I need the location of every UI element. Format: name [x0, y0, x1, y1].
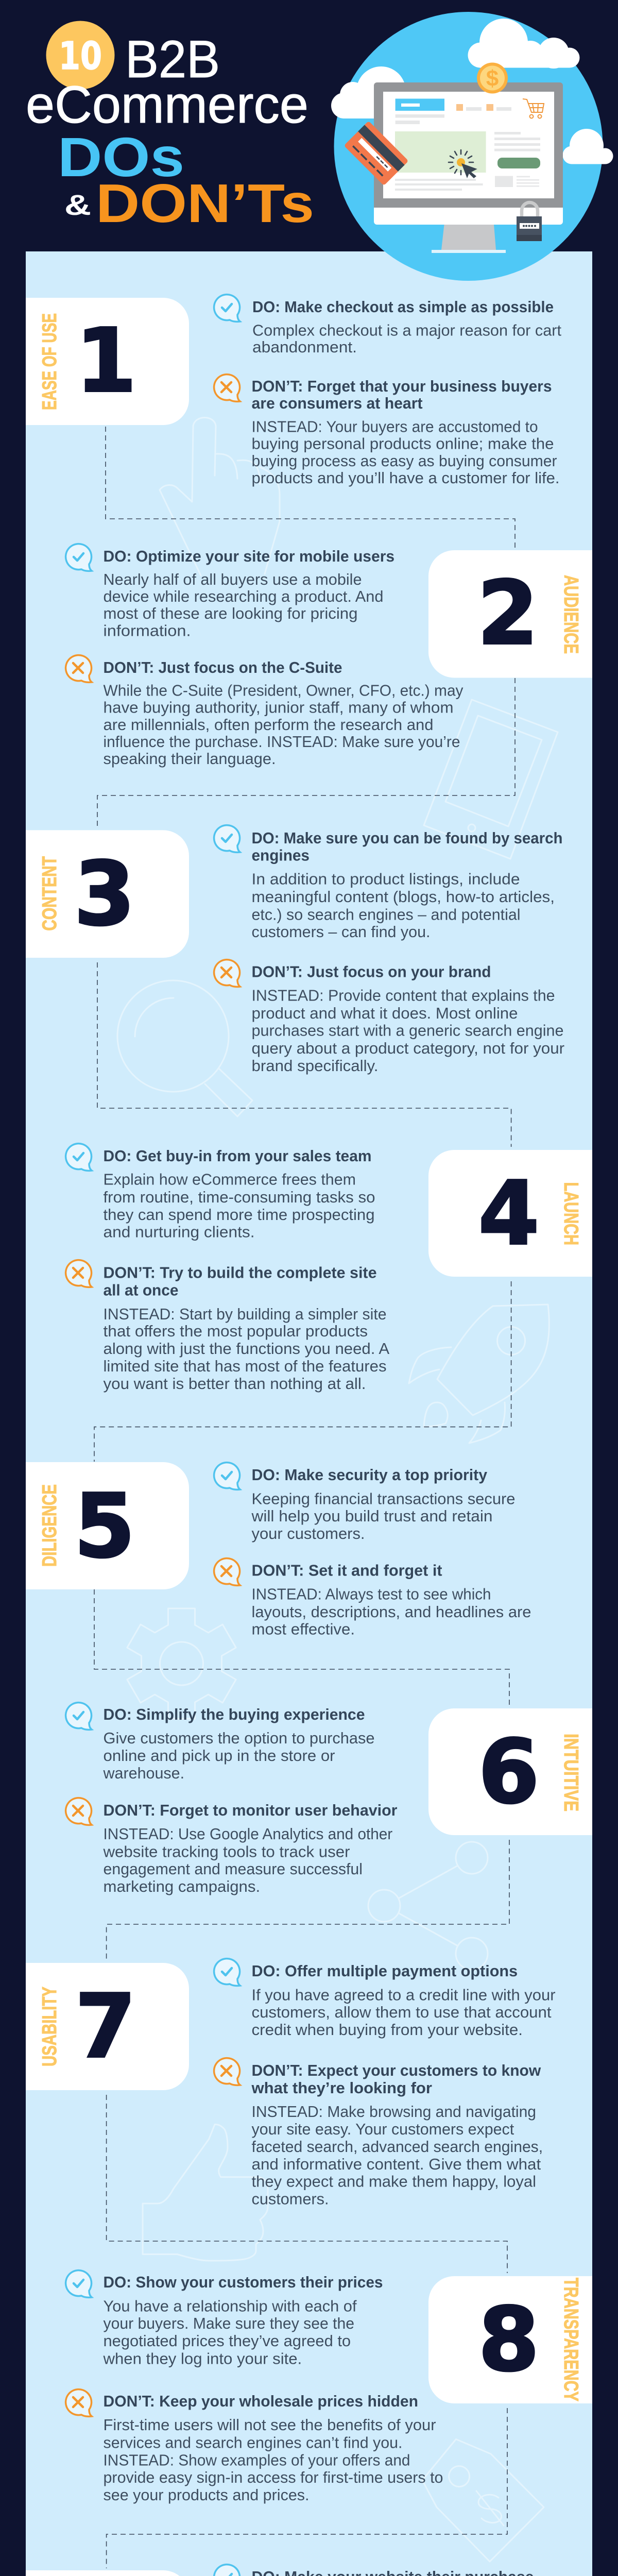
do text: DO: Simplify the buying experience: [103, 1705, 365, 1723]
don't text: [251, 962, 564, 1075]
don't text: engagement and measure successful: [103, 1860, 363, 1878]
don't text: what they’re looking for: [251, 2079, 432, 2097]
icon: credit card: [344, 121, 408, 185]
background icon: thumbs up: [143, 2124, 268, 2261]
do text: engines: [251, 846, 310, 865]
do text: most of these are looking for pricing: [103, 604, 357, 622]
do text: meaningful content (blogs, how-to articles,: [251, 888, 555, 906]
do text: from routine, time-consuming tasks so: [103, 1188, 375, 1206]
do text: information.: [103, 621, 191, 640]
icon: clouds: [331, 19, 613, 164]
step 6: intuitive: [66, 1703, 592, 1895]
background icon: rocket: [409, 1304, 549, 1443]
step 2: audience: [66, 544, 592, 768]
don't text: INSTEAD: Start by building a simpler site: [103, 1305, 386, 1323]
icon: do checkmark bubble: [214, 825, 240, 852]
number tab 2: [428, 550, 592, 678]
do text: Keeping financial transactions secure: [251, 1490, 515, 1507]
don't text: DON’T: Just focus on the C-Suite: [103, 658, 342, 676]
don't text: INSTEAD: Your buyers are accustomed to: [251, 417, 538, 436]
header illustration: computer with clouds: [331, 12, 613, 281]
do text: abandonment.: [252, 338, 357, 356]
don't text: While the C-Suite (President, Owner, CFO, etc.) may: [103, 682, 464, 700]
icon: don't cross bubble: [214, 960, 240, 987]
don't text: DON’T: Keep your wholesale prices hidden: [103, 2392, 418, 2410]
step 7: usability: [26, 1959, 555, 2208]
number tab 4: [428, 1150, 592, 1277]
badge number: 10: [59, 34, 102, 78]
icon: do checkmark bubble: [66, 1144, 92, 1171]
step 1: ease of use: [26, 295, 561, 487]
icon: don't cross bubble: [214, 375, 240, 401]
don't text: query about a product category, not for your: [251, 1039, 564, 1057]
do text: DO: Get buy-in from your sales team: [103, 1147, 372, 1165]
icon: do checkmark bubble: [214, 2565, 240, 2576]
dashed connector path: [94, 427, 515, 2576]
don't text: [251, 2061, 543, 2208]
don't text: are millennials, often perform the research and: [103, 716, 434, 734]
don't text: DON’T: Expect your customers to know: [251, 2061, 541, 2079]
icon: padlock: [517, 202, 542, 241]
number tab 7: [26, 1963, 189, 2090]
step 9: loyalty: [26, 2565, 552, 2576]
background icon: smartphone: [424, 700, 558, 859]
do text: DO: Make checkout as simple as possible: [252, 298, 554, 316]
do text: customers, allow them to use that account: [251, 2003, 552, 2021]
number tab 8: TRANSPARENCY: [560, 2278, 582, 2401]
step 4: launch: [66, 1144, 592, 1393]
don't text: speaking their language.: [103, 750, 276, 768]
do text: [103, 1705, 375, 1782]
don't text: DON’T: Set it and forget it: [251, 1561, 442, 1580]
don't text: [103, 1264, 389, 1393]
do text: Explain how eCommerce frees them: [103, 1171, 356, 1189]
don't text: INSTEAD: Show examples of your offers and: [103, 2451, 410, 2469]
number tab 2: 2: [477, 563, 538, 665]
don't text: layouts, descriptions, and headlines are: [251, 1603, 531, 1621]
do text: when they log into your site.: [102, 2349, 302, 2368]
number tab 8: [428, 2276, 592, 2403]
don't text: INSTEAD: Always test to see which: [251, 1585, 491, 1603]
do text: [251, 829, 562, 941]
don't text: services and search engines can’t find you.: [103, 2434, 403, 2452]
icon: don't cross bubble: [66, 1798, 92, 1825]
icon: don't cross bubble: [214, 1558, 240, 1585]
number tab 6: INTUITIVE: [560, 1734, 582, 1811]
do text: [103, 547, 394, 640]
background icon: price tag: [422, 2439, 544, 2562]
don't text: INSTEAD: Make browsing and navigating: [251, 2103, 536, 2121]
do text: will help you build trust and retain: [251, 1507, 492, 1525]
don't text: see your products and prices.: [103, 2486, 309, 2504]
don't text: First-time users will not see the benefits of your: [103, 2416, 436, 2434]
icon: do checkmark bubble: [66, 544, 92, 571]
number tab 1: 1: [76, 310, 136, 412]
number tab 6: [428, 1708, 592, 1835]
do text: they can spend more time prospecting: [103, 1206, 375, 1224]
icon: don't cross bubble: [66, 1260, 92, 1287]
icon: dollar coin: $: [486, 66, 499, 91]
step 5: diligence: [26, 1462, 531, 1638]
don't text: your site easy. Your customers expect: [251, 2120, 514, 2138]
do text: DO: Offer multiple payment options: [251, 1962, 518, 1980]
title line: B2B: B2B: [125, 30, 220, 89]
number tab 3: 3: [74, 843, 135, 945]
icon: don't cross bubble: [214, 2058, 240, 2085]
don't text: [251, 377, 559, 487]
background icon: gear: [127, 1608, 236, 1719]
number tab 9: [26, 2570, 189, 2576]
don't text: purchases start with a generic search engine: [251, 1022, 563, 1040]
number tab 4: 4: [478, 1163, 539, 1265]
don't text: [103, 2392, 443, 2504]
do text: DO: Optimize your site for mobile users: [103, 547, 394, 565]
don't text: limited site that has most of the features: [103, 1357, 386, 1375]
don't text: most effective.: [251, 1620, 355, 1638]
do text: In addition to product listings, include: [251, 870, 520, 888]
title line: eCommerce: eCommerce: [26, 75, 308, 134]
do text: DO: Show your customers their prices: [103, 2273, 383, 2291]
number tab 7: USABILITY: [39, 1987, 61, 2066]
do text: etc.) so search engines – and potential: [251, 906, 520, 923]
icon: don't cross bubble: [66, 655, 92, 682]
do text: [103, 1147, 375, 1241]
don't text: they expect and make them happy, loyal: [251, 2173, 536, 2191]
icon: do checkmark bubble: [214, 295, 240, 321]
don't text: are consumers at heart: [251, 394, 422, 412]
do text: [102, 2273, 383, 2368]
do text: Give customers the option to purchase: [103, 1729, 375, 1747]
do text: your buyers. Make sure they see the: [103, 2314, 354, 2332]
number tab 5: 5: [74, 1476, 135, 1578]
don't text: you want is better than nothing at all.: [103, 1375, 366, 1393]
do text: and nurturing clients.: [103, 1223, 254, 1241]
don't text: faceted search, advanced search engines,: [251, 2138, 543, 2156]
background icon: share network: [368, 1842, 488, 1970]
number tab 5: DILIGENCE: [39, 1484, 61, 1567]
icon: shopping cart: [523, 99, 544, 118]
don't text: customers.: [251, 2190, 329, 2208]
don't text: marketing campaigns.: [103, 1877, 260, 1895]
don't text: brand specifically.: [251, 1057, 378, 1075]
icon: do checkmark bubble: [66, 1703, 92, 1730]
do text: Complex checkout is a major reason for cart: [252, 321, 561, 340]
do text: If you have agreed to a credit line with your: [251, 1986, 555, 2004]
title ampersand: &: [64, 189, 91, 221]
don't text: all at once: [103, 1281, 178, 1299]
title line: DOs: DOs: [58, 126, 184, 188]
don't text: buying personal products online; make the: [251, 435, 554, 453]
icon: do checkmark bubble: [214, 1959, 240, 1986]
don't text: INSTEAD: Provide content that explains the: [251, 986, 555, 1004]
icon: yellow number badge: [46, 21, 114, 90]
background icon: pointing hand: [160, 417, 280, 575]
number tab 3: [26, 830, 189, 958]
do text: credit when buying from your website.: [251, 2021, 523, 2039]
don't text: [251, 1561, 531, 1638]
number tab 8: 8: [478, 2289, 539, 2391]
don't text: have buying authority, junior staff, many of whom: [103, 699, 453, 717]
do text: You have a relationship with each of: [103, 2297, 357, 2315]
don't text: provide easy sign-in access for first-time users to: [103, 2468, 443, 2486]
do text: warehouse.: [103, 1764, 184, 1782]
don't text: that offers the most popular products: [103, 1322, 368, 1340]
don't text: website tracking tools to track user: [102, 1842, 350, 1860]
number tab 7: 7: [75, 1976, 136, 2078]
icon: do checkmark bubble: [66, 2270, 92, 2297]
do text: [251, 1466, 515, 1543]
icon: do checkmark bubble: [214, 1463, 240, 1489]
title line: DON'Ts: DON’Ts: [96, 173, 314, 234]
do text: device while researching a product. And: [103, 587, 383, 605]
do text: your customers.: [251, 1524, 365, 1543]
do text: DO: Make security a top priority: [251, 1466, 488, 1484]
do text: negotiated prices they’ve agreed to: [103, 2332, 351, 2350]
don't text: DON’T: Forget to monitor user behavior: [103, 1801, 398, 1819]
do text: [251, 1962, 555, 2039]
do text: Nearly half of all buyers use a mobile: [103, 570, 362, 588]
do text: [252, 298, 561, 356]
don't text: DON’T: Forget that your business buyers: [251, 377, 552, 395]
step 3: content: [26, 825, 564, 1075]
icon: dollar coin: [477, 63, 508, 94]
do text: customers – can find you.: [251, 923, 431, 941]
don't text: DON’T: Just focus on your brand: [251, 962, 491, 981]
don't text: [103, 658, 464, 768]
don't text: [102, 1801, 398, 1895]
icon: monitor: [374, 82, 563, 253]
don't text: influence the purchase. INSTEAD: Make sure you’re: [103, 733, 460, 751]
don't text: and informative content. Give them what: [251, 2155, 541, 2173]
don't text: product and what it does. Most online: [251, 1004, 518, 1022]
title: [26, 21, 314, 234]
don't text: buying process as easy as buying consumer: [251, 452, 557, 470]
don't text: products and you’ll have a customer for life.: [251, 469, 559, 487]
number tab 5: [26, 1462, 189, 1589]
do text: online and pick up in the store or: [103, 1747, 335, 1765]
icon: don't cross bubble: [66, 2389, 92, 2416]
number tab 3: CONTENT: [39, 856, 61, 931]
number tab 4: LAUNCH: [560, 1182, 582, 1245]
don't text: INSTEAD: Use Google Analytics and other: [103, 1825, 392, 1843]
background icon: magnifying glass: [117, 980, 252, 1116]
number tab 2: AUDIENCE: [560, 575, 582, 654]
number tab 1: [26, 298, 189, 425]
don't text: along with just the functions you need. A: [103, 1340, 389, 1358]
number tab 6: 6: [478, 1721, 539, 1823]
icon: click cursor: [449, 150, 477, 178]
number tab 1: EASE OF USE: [39, 313, 61, 410]
do text: DO: Make sure you can be found by search: [251, 829, 562, 847]
don't text: DON’T: Try to build the complete site: [103, 1264, 377, 1282]
step 8: transparency: [66, 2270, 592, 2504]
